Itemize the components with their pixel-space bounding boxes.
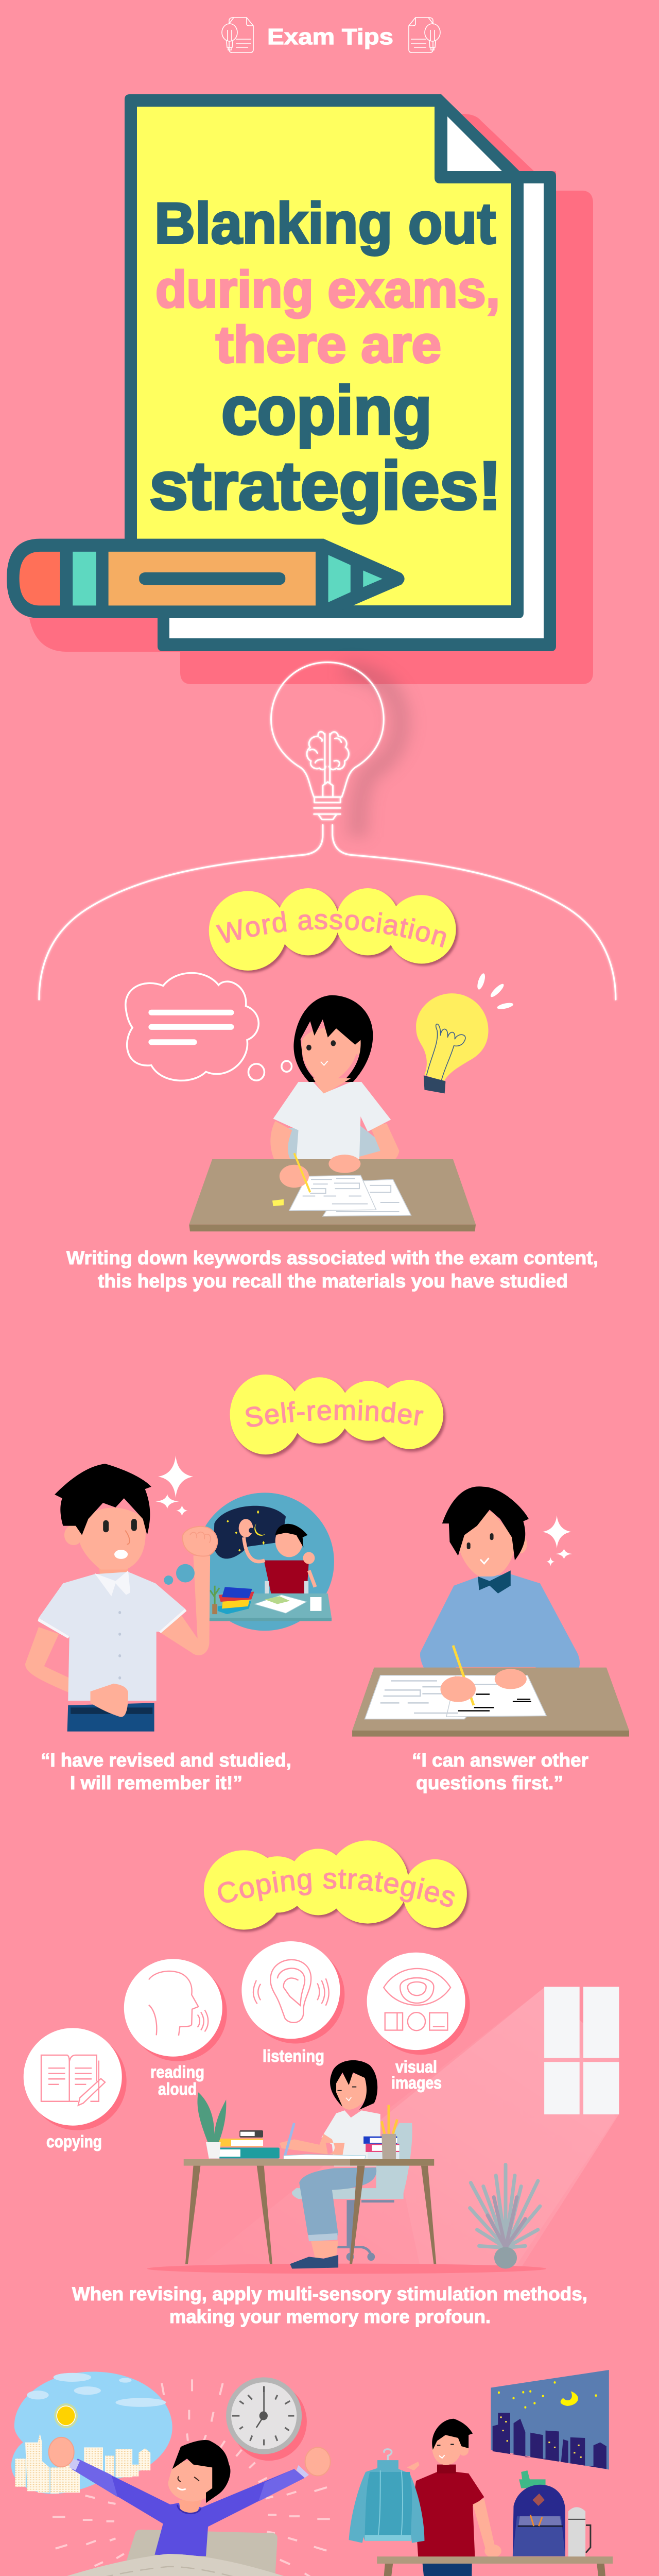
paper lines [380, 1681, 500, 1713]
morning sky bubble [11, 2371, 172, 2494]
circle [367, 1953, 465, 2050]
cable arc left [39, 825, 323, 999]
line 1: visual [395, 2057, 437, 2076]
collar [478, 1570, 511, 1594]
pillow [126, 2530, 278, 2574]
exam papers [365, 1675, 483, 1719]
thought cloud [126, 973, 292, 1080]
smile [177, 2487, 186, 2490]
circle [24, 2028, 122, 2126]
icon: left document with bulb [222, 18, 253, 53]
page fold triangle [447, 116, 502, 171]
shirt [321, 2110, 380, 2166]
smile [439, 2455, 445, 2458]
face [458, 1512, 515, 1577]
alarm clock [226, 2377, 302, 2454]
back page white edge [524, 183, 544, 638]
pencil outline [7, 539, 405, 618]
woman head [293, 995, 373, 1082]
chair base [336, 2247, 372, 2257]
line 1: “I have revised and studied, [41, 1750, 291, 1771]
bulb outline [271, 663, 384, 820]
circle shadow [28, 2032, 127, 2130]
badge bubbles [230, 1375, 443, 1454]
shirt buttons [118, 1613, 121, 1678]
thought bubbles [164, 1564, 195, 1585]
section: get enough sleep [0, 2371, 380, 2576]
sensory icon: visual images [367, 1953, 470, 2055]
cuffs [70, 2459, 309, 2478]
hair [330, 2060, 377, 2110]
line 2: aloud [158, 2079, 197, 2098]
nose [125, 1531, 130, 1544]
boy raised arm [159, 1556, 210, 1655]
pencil [7, 539, 405, 618]
floor shadow [147, 2264, 546, 2274]
blanket top layer [0, 2554, 320, 2576]
neck [179, 2500, 202, 2513]
stationery [519, 2470, 546, 2488]
chair stem [346, 2200, 394, 2246]
alarm clock shadow [231, 2383, 307, 2461]
boy hair [55, 1464, 151, 1535]
face [168, 2460, 223, 2501]
hand [484, 2545, 501, 2557]
eye and nose [178, 2477, 199, 2482]
circle shadow [372, 1957, 470, 2055]
woman body and desk [189, 1078, 476, 1231]
pencil stripe [139, 572, 285, 585]
chair [445, 1632, 544, 1667]
yellow page [137, 107, 511, 605]
red shirt [414, 2472, 484, 2557]
eye and shapes [384, 1969, 450, 2030]
circle shadow [246, 1946, 344, 2043]
circle shadow [129, 1963, 227, 2061]
pencil [453, 1646, 474, 1705]
illustration: boy writing [352, 1486, 629, 1737]
chair seat [292, 2188, 404, 2199]
grey plant [470, 2165, 540, 2269]
ear [366, 2086, 374, 2096]
radial dashes [53, 2379, 330, 2576]
front page outline [125, 94, 524, 618]
night city [493, 2413, 606, 2469]
table legs [376, 2564, 614, 2576]
desk top right [350, 2159, 434, 2166]
label: copying: copying [46, 2132, 102, 2151]
idea bulb [416, 973, 514, 1093]
eyes [337, 2087, 356, 2091]
ferrule [73, 552, 96, 605]
sensory icon: copying [24, 2028, 127, 2130]
table top [377, 2556, 613, 2564]
desk legs [185, 2166, 436, 2264]
badge bubbles [209, 888, 456, 971]
pencil cup and pencils [363, 2105, 399, 2159]
bottle [568, 2507, 591, 2557]
fists [49, 2437, 331, 2476]
line 1: Writing down keywords associated with the exam content, [66, 1247, 598, 1268]
night window [491, 2370, 609, 2469]
neck collar [177, 2505, 201, 2514]
stars [499, 2382, 596, 2408]
boy eyes [106, 1522, 134, 1530]
city buildings [15, 2433, 150, 2494]
ankle [311, 2241, 338, 2259]
ear [514, 1535, 527, 1553]
smile highlight [480, 1558, 489, 1564]
jeans cuff [308, 2233, 337, 2241]
sparkles [155, 1455, 193, 1517]
face [335, 2074, 368, 2110]
hero: document and pencil [7, 94, 593, 684]
sun core [57, 2406, 75, 2426]
arm [280, 2134, 344, 2156]
sun [54, 2403, 78, 2428]
ear [459, 2445, 469, 2455]
face [432, 2435, 462, 2465]
hair [172, 2440, 230, 2503]
section: coping strategies [24, 1840, 619, 2327]
header: Exam Tips [222, 18, 440, 53]
blanket stitches [0, 2567, 357, 2576]
clouds [27, 2373, 166, 2407]
document shadow [29, 114, 593, 684]
memory scene circle [196, 1493, 334, 1631]
bed blanket [0, 2554, 380, 2576]
line 2: I will remember it!” [70, 1772, 242, 1793]
backpack [513, 2485, 565, 2556]
line 1: When revising, apply multi-sensory stimulation methods, [72, 2283, 587, 2304]
desk [352, 1668, 629, 1731]
shirt details [38, 1570, 186, 1638]
boy left arm [25, 1627, 93, 1701]
line 1: “I can answer other [412, 1750, 588, 1771]
sweater [420, 1574, 580, 1685]
ear [270, 1960, 311, 2023]
window light beams [198, 1988, 619, 2267]
moon [561, 2391, 578, 2406]
title line 4: coping [221, 372, 432, 448]
answers written [458, 1694, 531, 1711]
illustration: thinking woman at desk [126, 973, 514, 1231]
circle shape [408, 2012, 425, 2030]
boy ear [64, 1525, 83, 1545]
circle [124, 1959, 222, 2057]
line 2: this helps you recall the materials you have studied [98, 1270, 568, 1292]
pen [285, 2123, 294, 2156]
arm [473, 2499, 495, 2549]
small hand behind sweater [407, 2462, 420, 2470]
description text [72, 2283, 587, 2327]
hands [440, 1669, 527, 1702]
icon: right document with bulb [409, 18, 440, 53]
sound waves [253, 1978, 329, 2006]
light bulb connector with brain [39, 663, 616, 999]
neck [437, 2465, 456, 2473]
eraser [20, 552, 60, 605]
section: self-reminder [25, 1375, 629, 1793]
man's legs [422, 2562, 472, 2576]
title line 1: Blanking out [154, 191, 496, 256]
line 2: images [391, 2073, 442, 2092]
label: visual images [391, 2057, 442, 2092]
pencil cone [328, 555, 351, 602]
boy face [80, 1507, 146, 1569]
badge text: Coping strategies [218, 1869, 455, 1907]
chair wheels [346, 2253, 375, 2261]
potted plant on desk [197, 2092, 226, 2159]
jeans [299, 2167, 376, 2241]
eyes [469, 1535, 492, 1548]
boy neck [99, 1565, 128, 1581]
head profile [149, 1971, 208, 2036]
lit windows [500, 2417, 582, 2457]
badge bubbles [204, 1840, 467, 1930]
sensory icon: listening [241, 1941, 344, 2043]
desk front [352, 1731, 629, 1737]
section: word association [66, 888, 598, 1292]
badge text: Word association [215, 911, 446, 947]
circle [241, 1941, 340, 2039]
line 2: questions first.” [416, 1772, 563, 1793]
belt [71, 1707, 152, 1714]
heading text: Exam Tips [267, 24, 393, 49]
line 1: reading [150, 2062, 204, 2081]
badge text: Self-reminder [246, 1399, 424, 1427]
boy hand on belt [91, 1684, 128, 1717]
open book [284, 2155, 366, 2159]
hair [432, 2419, 473, 2450]
quote left [41, 1750, 291, 1793]
smile [346, 2097, 351, 2100]
pencil body [109, 552, 316, 605]
chair [376, 2123, 412, 2199]
cable arc right [333, 825, 616, 999]
pencil tip [363, 570, 383, 587]
sensory icon: reading aloud [124, 1959, 227, 2061]
back page [158, 171, 556, 651]
illustration: boy remembering [25, 1455, 334, 1732]
sparkles [542, 1515, 573, 1566]
bulb soft shadow [344, 671, 401, 837]
title line 2: during exams, [155, 261, 500, 318]
open book and pen [41, 2055, 105, 2105]
book stack left [209, 2130, 280, 2159]
section: pack items [320, 2370, 634, 2576]
boy mouth [114, 1550, 128, 1559]
hair [442, 1486, 529, 1561]
boy trousers [67, 1703, 154, 1732]
back page white sheet [169, 515, 544, 638]
quote right [412, 1750, 588, 1793]
description text [66, 1247, 598, 1292]
label: listening: listening [263, 2046, 324, 2065]
desk top [184, 2159, 350, 2166]
illustration: woman revising at desk [147, 2060, 546, 2274]
boy fist [183, 1527, 217, 1556]
window [544, 1987, 619, 2114]
label: reading aloud [150, 2062, 204, 2098]
sweater and raised arms [72, 2459, 305, 2556]
shoes [290, 2255, 338, 2269]
boy shirt [39, 1572, 185, 1701]
title line 3: there are [216, 316, 441, 374]
title line 5: strategies! [149, 448, 501, 523]
sweater on hanger [349, 2449, 424, 2543]
fist knuckles [190, 1532, 211, 1543]
top paper [446, 1675, 546, 1717]
sleeve highlights [72, 2459, 305, 2501]
line 2: making your memory more profoun. [169, 2306, 491, 2327]
